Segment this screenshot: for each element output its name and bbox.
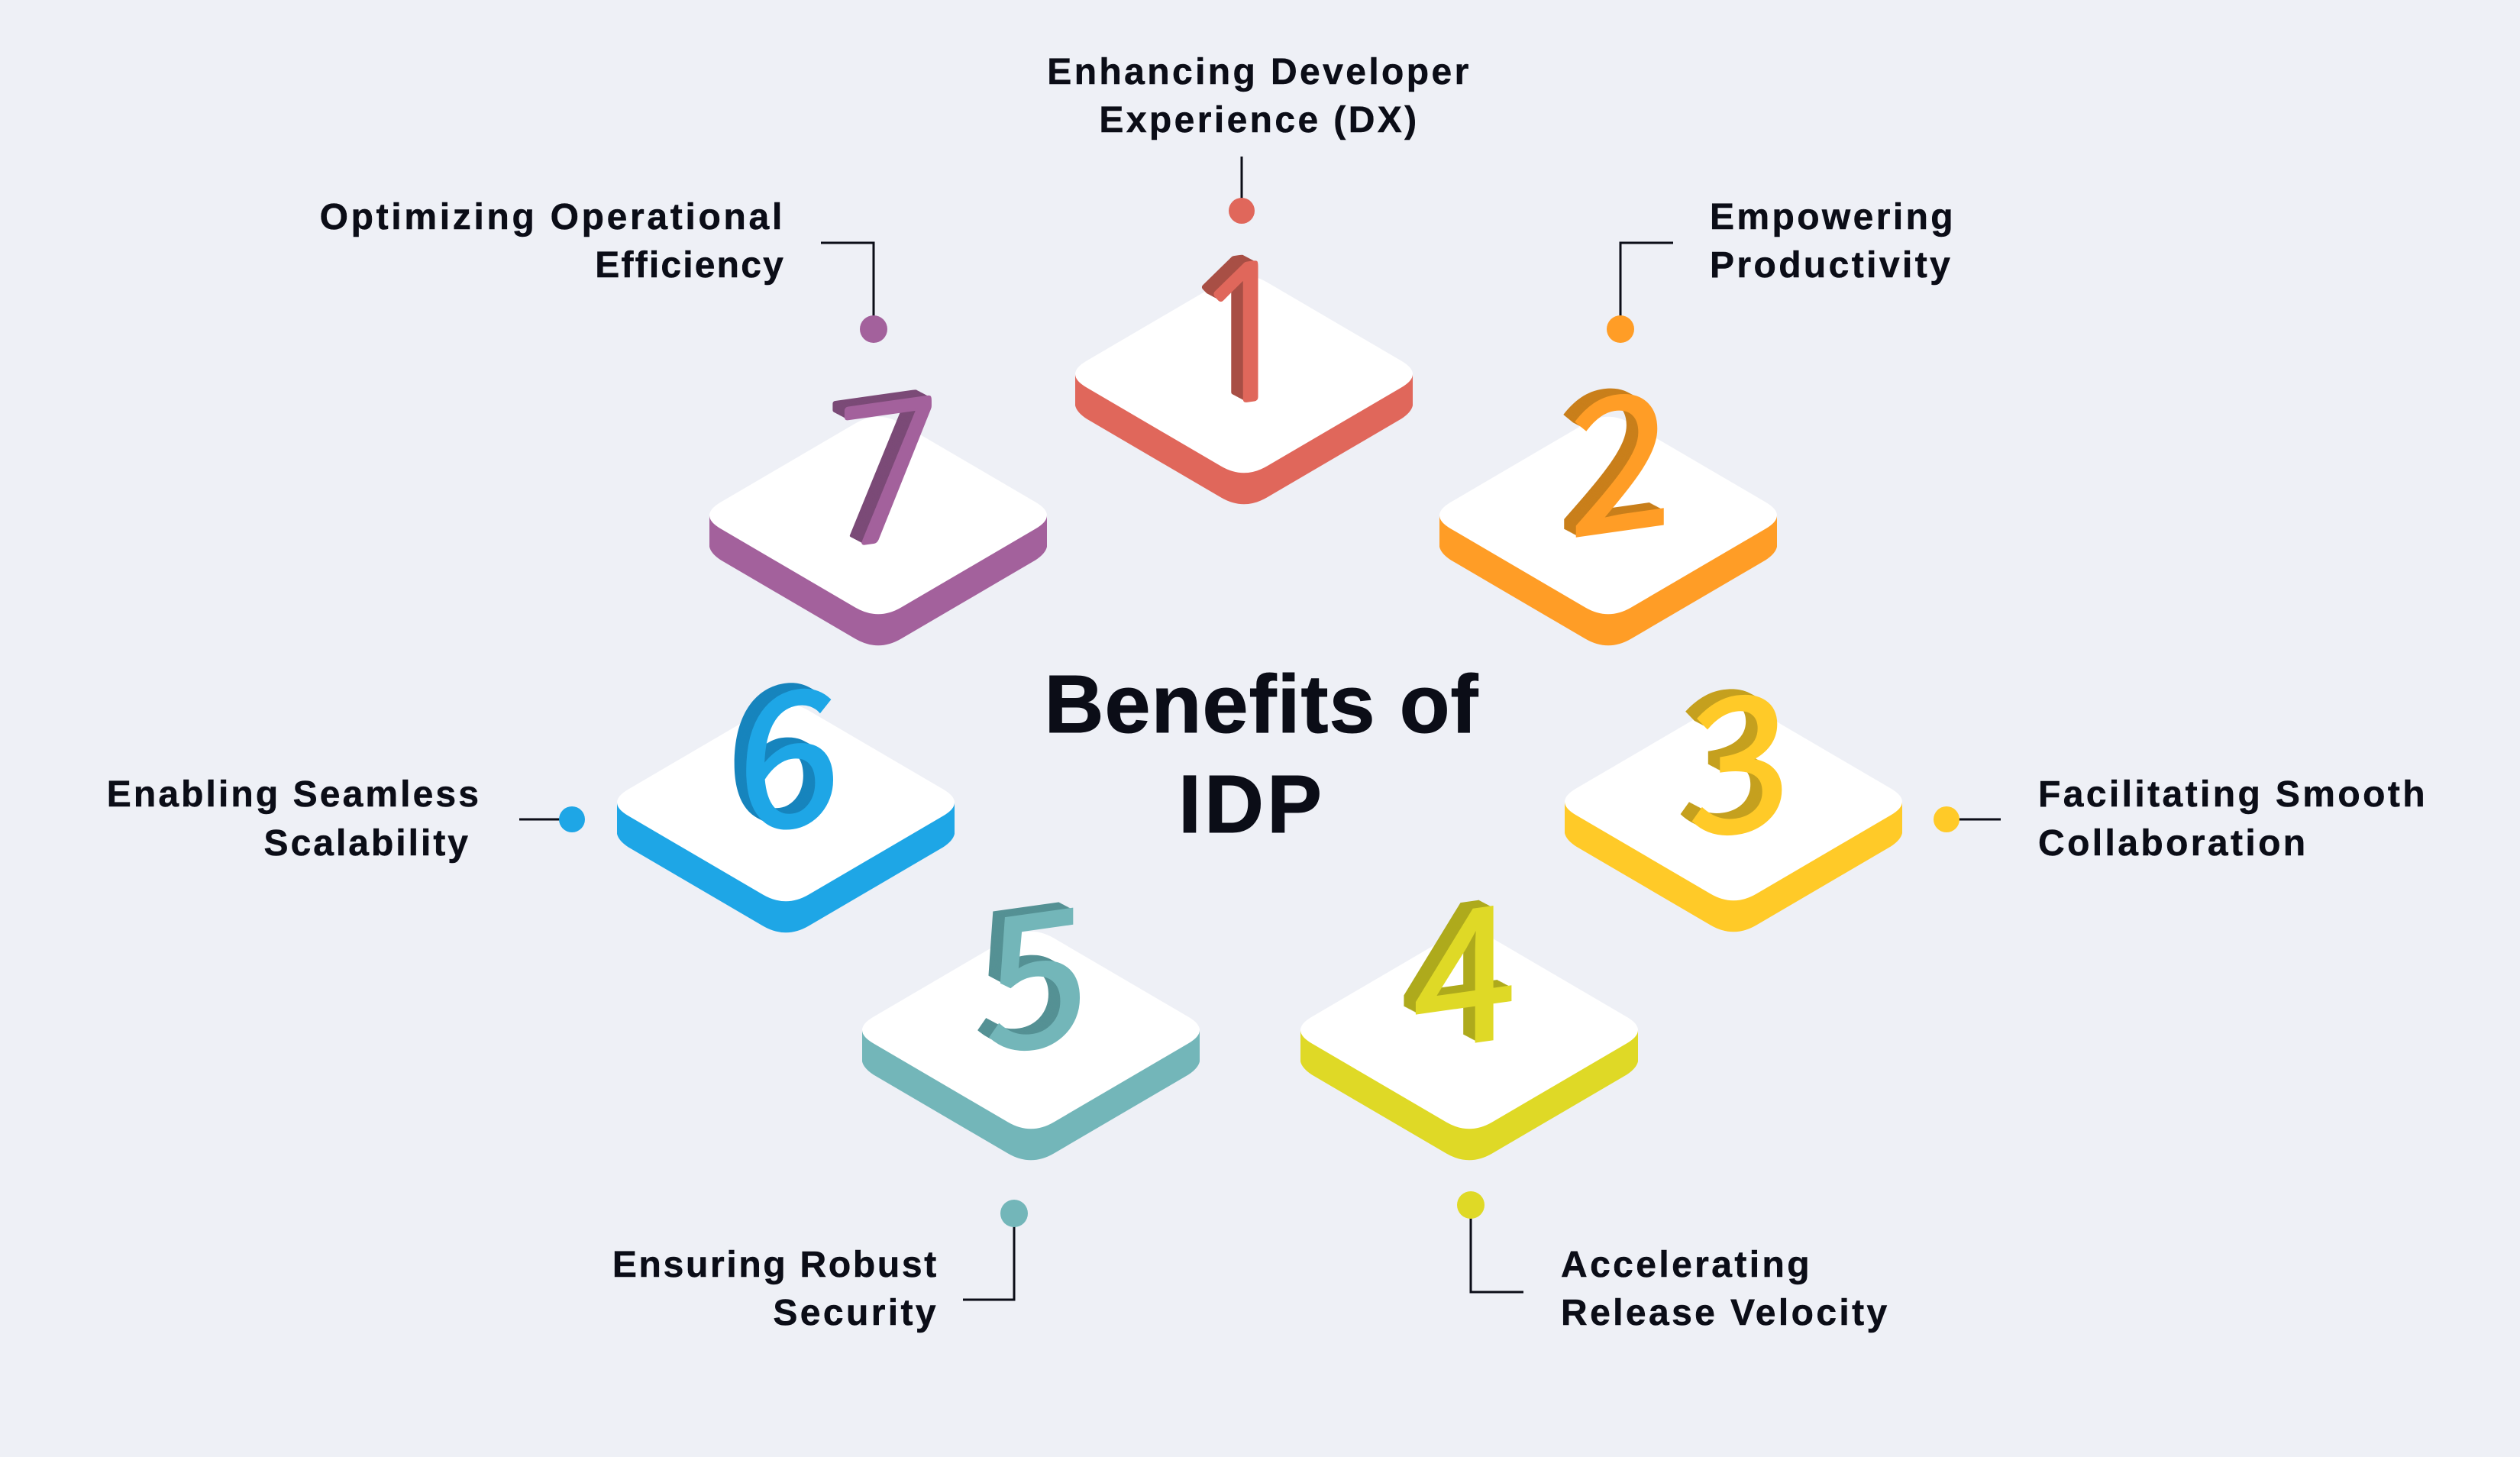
label 6: [107, 774, 481, 864]
connector 4: [1457, 1191, 1523, 1292]
label 2: Empowering: [1710, 197, 1956, 237]
label 6: Scalability: [264, 823, 470, 864]
label 5: Ensuring Robust: [612, 1245, 939, 1285]
numeral 7: 7: [832, 373, 945, 574]
numeral 5: 5: [985, 823, 1088, 1106]
platform 1 with numeral: [1075, 234, 1413, 504]
label 4: [1561, 1245, 1890, 1333]
title: [1044, 657, 1479, 850]
title: IDP: [1178, 758, 1325, 850]
numeral 2: 2: [1569, 308, 1672, 590]
label 4: Accelerating: [1561, 1245, 1812, 1285]
platform 5 with numeral: [862, 823, 1200, 1161]
label 1: [1047, 52, 1472, 141]
numeral 3: 3: [1688, 608, 1791, 891]
label 2: [1710, 197, 1956, 286]
connector 7: [821, 243, 887, 343]
label 7: Efficiency: [595, 245, 785, 286]
label 3: Collaboration: [2038, 823, 2308, 864]
numeral 6: 6: [737, 604, 840, 887]
label 7: [320, 197, 785, 286]
label 6: Enabling Seamless: [107, 774, 481, 815]
connector 1: [1229, 157, 1255, 224]
platform 4 with numeral: [1300, 821, 1638, 1161]
connector 2: [1607, 243, 1673, 343]
connector 3: [1934, 806, 2001, 832]
label 2: Productivity: [1710, 245, 1953, 286]
numeral 1: 1: [1188, 234, 1301, 435]
numeral 4: 4: [1413, 821, 1516, 1103]
platform 7 with numeral: [709, 373, 1047, 646]
label 1: Enhancing Developer: [1047, 52, 1472, 92]
label 5: Security: [773, 1293, 939, 1333]
label 3: Facilitating Smooth: [2038, 774, 2428, 815]
label 3: [2038, 774, 2428, 864]
label 4: Release Velocity: [1561, 1293, 1890, 1333]
connector 6: [519, 806, 585, 832]
label 1: Experience (DX): [1099, 100, 1420, 141]
platform 6 with numeral: [617, 604, 955, 933]
title: Benefits of: [1044, 657, 1479, 750]
label 5: [612, 1245, 939, 1333]
label 7: Optimizing Operational: [320, 197, 785, 237]
platform 2 with numeral: [1439, 308, 1777, 646]
connector 5: [963, 1200, 1028, 1300]
platform 3 with numeral: [1565, 608, 1902, 932]
